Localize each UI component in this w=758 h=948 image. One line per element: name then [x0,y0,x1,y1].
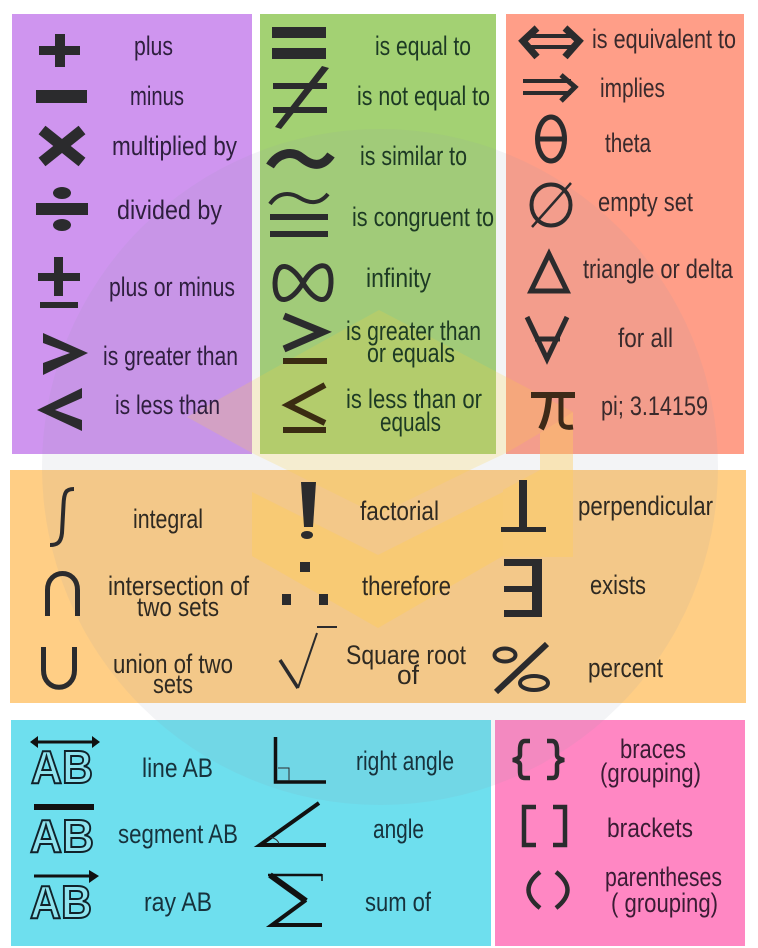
label: intersection of two sets: intersection of [108,571,249,601]
label: square root of: of [397,660,419,690]
label: square root of: Square root [346,640,466,670]
label: is greater than: is greater than [103,341,238,371]
label: is less than: is less than [115,390,220,420]
icon: plus or minus [38,257,80,308]
label: ray AB: ray AB [144,887,212,917]
label: is similar to: is similar to [360,141,467,171]
panel: arithmetic symbols [12,14,252,454]
label: minus: minus [130,81,184,111]
label: plus: plus [134,31,173,61]
icon: infinity [275,266,331,300]
label: segment AB: segment AB [118,819,238,849]
label: brackets: brackets [607,813,693,843]
panel: comparison symbols [260,14,496,454]
label: right angle: right angle [356,746,454,776]
label: union of two sets: sets [153,669,193,699]
label: plus or minus: plus or minus [109,272,235,302]
icon: minus [36,90,87,103]
icon: parentheses [528,872,568,908]
icon: multiplication [42,130,82,162]
icon: integral [50,489,74,545]
label: integral: integral [133,504,203,534]
label: theta: theta [605,128,652,158]
icon: perpendicular [501,480,546,532]
label: exists: exists [590,570,646,600]
label: is less than or equals: is less than or [346,384,482,414]
label: infinity: infinity [366,263,431,293]
icon: less than or equal [283,385,326,433]
panel: logic and greek symbols [506,14,744,454]
label: is less than or equals [346,384,482,437]
label: is not equal to: is not equal to [357,81,490,111]
label: is greater than or equals: is greater than [346,316,481,346]
icon: braces [513,741,564,778]
label: square root of [346,640,466,690]
icon: pi [531,392,575,429]
label: perpendicular: perpendicular [578,491,713,521]
icon: line AB: AB [31,741,93,793]
icon: union [44,647,74,687]
label: intersection of two sets: two sets [137,592,219,622]
label: line AB: line AB [142,753,213,783]
icon: percent [494,644,548,692]
label: union of two sets: union of two [113,649,233,679]
icon: plus [39,34,80,67]
label: implies: implies [600,73,665,103]
icon: therefore [282,562,328,605]
label: is equal to: is equal to [375,31,471,61]
icon: intersection [48,574,78,616]
icon: division [36,187,88,231]
panel: geometry symbols [11,720,491,946]
label: sum of: sum of [365,887,431,917]
icon: greater than [43,333,88,375]
label: braces grouping: braces [620,734,686,764]
icon: implies arrow [523,75,575,101]
icon: summation [268,874,322,925]
label: therefore: therefore [362,571,451,601]
label: intersection of two sets [108,571,249,622]
label: is greater than or equals [346,316,481,368]
label: union of two sets [113,649,233,699]
label: parentheses grouping [605,862,722,918]
label: is less than or equals: equals [380,407,441,437]
label: factorial: factorial [360,496,439,526]
icon: less than [37,388,82,431]
icon: for all [527,317,567,359]
label: parentheses grouping: parentheses [605,862,722,892]
icon: brackets [524,807,565,845]
icon: equivalent arrow [523,28,579,57]
label: pi value: pi; 3.14159 [601,391,708,421]
label: parentheses grouping: ( grouping) [611,888,718,918]
watermark: circle and logo [42,129,718,805]
label: angle: angle [373,814,424,844]
icon: square root [280,627,337,688]
icon: segment AB: AB [30,810,94,862]
icon: ray AB: AB [30,876,92,928]
icon: angle [260,803,326,845]
label: is greater than or equals: or equals [367,338,455,368]
label: multiplied by: multiplied by [112,131,237,161]
icon: theta [537,117,565,161]
icon: similar [270,154,331,166]
label: empty set: empty set [598,187,693,217]
label: is congruent to: is congruent to [352,202,494,232]
icon: empty set [532,183,571,227]
label: divided by: divided by [117,195,222,225]
label: for all: for all [618,323,673,353]
icon: equal [272,27,326,59]
icon: congruent [270,194,328,237]
label: percent: percent [588,653,663,683]
panel: calculus and set symbols [10,470,746,703]
label: braces grouping: (grouping) [600,758,701,788]
label: braces grouping [600,734,701,788]
panel: grouping symbols [495,720,745,946]
icon: factorial [301,482,316,539]
icon: right angle [276,737,326,782]
icon: exists [504,559,542,617]
icon: greater than or equal [283,316,327,364]
icon: not equal [273,66,329,129]
icon: triangle delta [531,254,567,291]
